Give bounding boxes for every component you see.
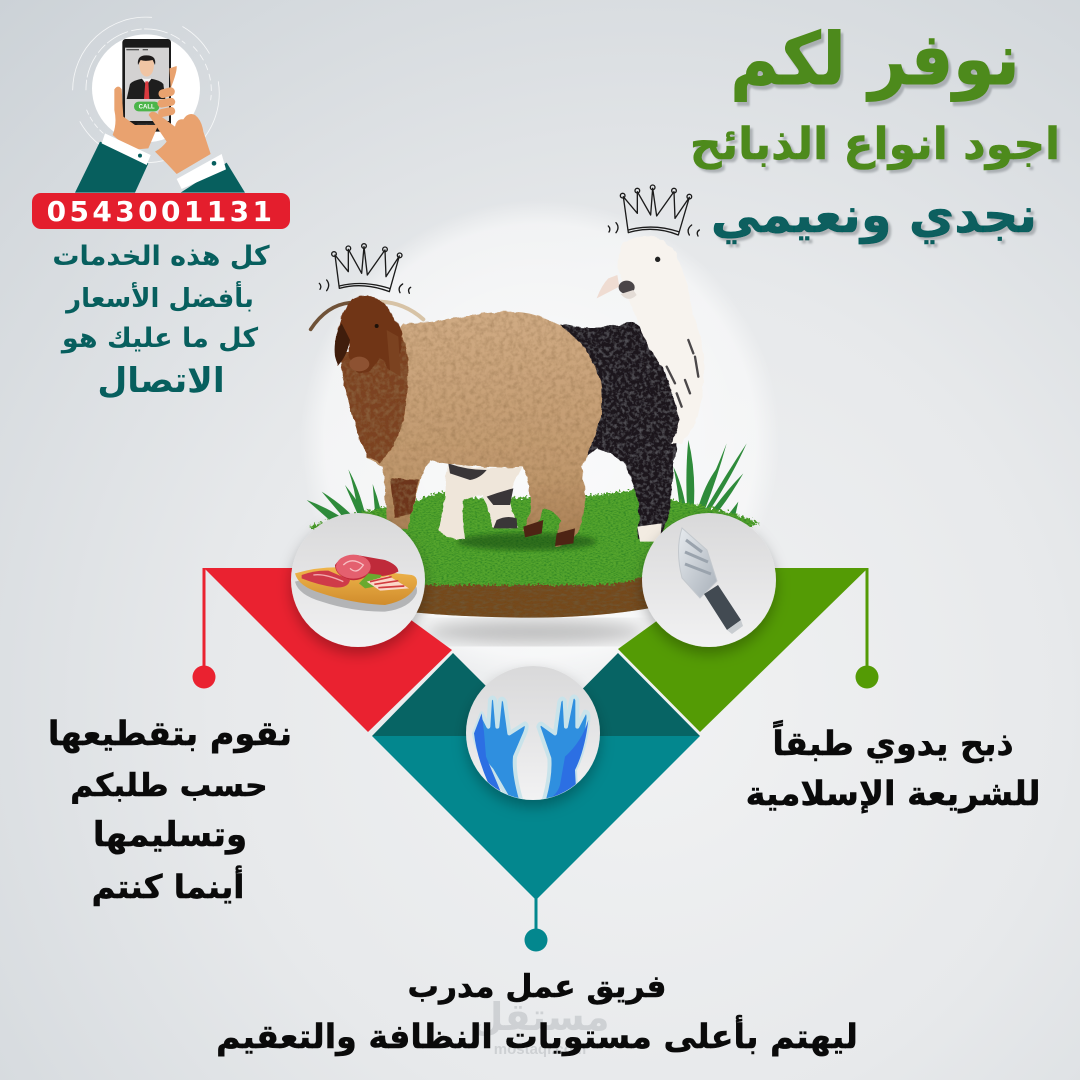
call-to-action text: كل ما عليك هو <box>60 323 258 354</box>
text: trained team: فريق عمل مدرب <box>408 969 666 1005</box>
icon disc: butcher knife <box>642 513 776 647</box>
far leg dark patches <box>448 463 517 528</box>
text: cutting and delivery service: نقوم بتقطيعها <box>48 714 292 754</box>
red service shape <box>192 568 452 732</box>
green service shape <box>618 568 878 732</box>
watermark <box>471 995 609 1058</box>
wool body <box>347 312 602 546</box>
watermark: mostaql.com <box>494 1041 586 1058</box>
brown sock <box>391 478 420 518</box>
phone call icon <box>73 17 245 193</box>
white neck and head <box>618 236 704 444</box>
icon disc: meat board <box>291 513 425 647</box>
lettuce <box>359 573 382 588</box>
left ear <box>335 323 350 365</box>
chin <box>621 290 637 299</box>
heading: we provide you: نوفر لكم <box>730 18 1020 102</box>
right pointing hand <box>149 112 211 174</box>
tan sheep <box>311 296 602 546</box>
board shadow <box>295 576 417 612</box>
shadow under sheep <box>457 533 597 550</box>
text: trained team: ليهتم بأعلى مستويات النظافة والتعقيم <box>216 1014 858 1057</box>
crown right <box>608 185 699 236</box>
body and legs <box>560 322 680 538</box>
heading: Najdi and Naimi: نجدي ونعيمي <box>711 186 1037 245</box>
brown neck <box>338 327 408 463</box>
white circle and dashed rings <box>73 17 219 163</box>
heading: best types of slaughter animals: اجود انواع الذبائح <box>690 119 1060 170</box>
meat slices <box>302 571 350 587</box>
text: slaughter service: ذبح يدوي طبقاً <box>772 720 1014 764</box>
left sleeve and cuff <box>75 133 151 193</box>
white glow behind sheep <box>300 200 780 680</box>
crown left <box>319 244 411 293</box>
horns <box>311 302 423 329</box>
shadow below soil <box>425 620 645 644</box>
handle <box>704 585 741 630</box>
call-to-action text: كل هذه الخدمات <box>52 241 270 272</box>
neck flecks <box>667 340 698 407</box>
muzzle <box>619 281 635 294</box>
text: cutting and delivery service: وتسليمها <box>93 815 247 855</box>
text: slaughter service <box>746 720 1040 814</box>
grass blades left <box>307 469 383 523</box>
call-to-action text: بأفضل الأسعار <box>64 281 254 314</box>
phone <box>122 39 171 132</box>
text: cutting and delivery service <box>48 714 292 906</box>
head <box>335 296 402 373</box>
teal service shape <box>372 653 700 952</box>
ear <box>597 275 619 298</box>
blade <box>678 528 717 598</box>
call button <box>134 102 159 111</box>
text: cutting and delivery service: حسب طلبكم <box>70 768 268 804</box>
right sleeve and cuff <box>177 154 245 193</box>
phone number bar: 0543001131 <box>47 195 275 228</box>
right glove <box>538 697 589 802</box>
bacon <box>367 576 409 591</box>
hooves <box>523 520 575 546</box>
front leg patch <box>637 523 662 542</box>
butt <box>727 620 743 634</box>
icon disc: blue gloves <box>466 666 600 802</box>
eye <box>655 257 660 262</box>
sheep on grass island <box>307 185 760 618</box>
soil <box>417 577 648 618</box>
right ear <box>387 330 401 377</box>
watermark: مستقل <box>471 995 609 1039</box>
meat roast <box>335 555 398 580</box>
black and white sheep <box>438 236 704 542</box>
far legs <box>438 463 523 539</box>
nose <box>349 357 369 371</box>
call-to-action text: الاتصال <box>97 361 225 401</box>
agent on screen <box>127 55 165 99</box>
eye <box>375 324 379 328</box>
left glove <box>474 697 527 802</box>
call-to-action text <box>52 241 270 401</box>
text: trained team <box>216 969 858 1057</box>
text: slaughter service: للشريعة الإسلامية <box>746 774 1040 814</box>
call button: CALL <box>139 105 155 111</box>
roast cut face <box>336 555 371 579</box>
title <box>690 18 1060 245</box>
grass blades right <box>673 440 747 517</box>
left holding hand <box>113 66 177 150</box>
text: cutting and delivery service: أينما كنتم <box>92 865 244 906</box>
wooden board <box>295 567 417 605</box>
grass island <box>308 490 760 585</box>
